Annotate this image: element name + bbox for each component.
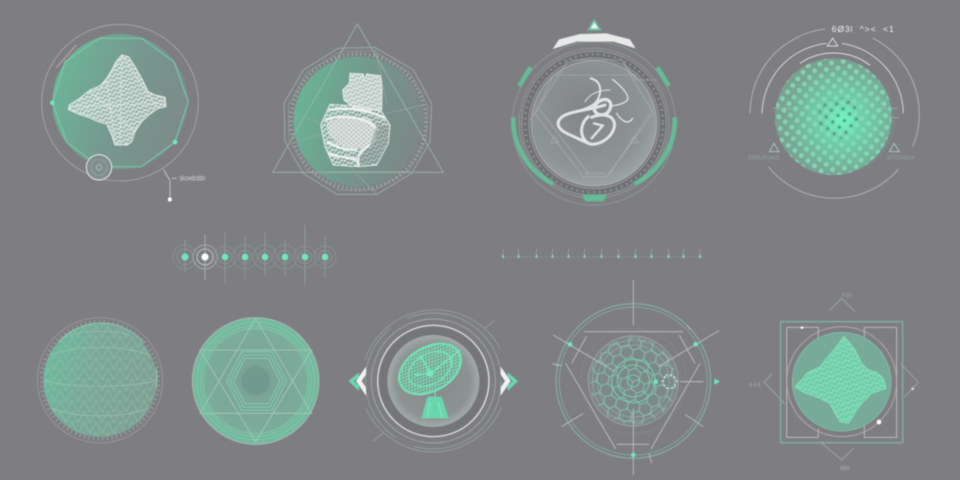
bottom label: 63%	[840, 466, 850, 472]
white ring	[378, 325, 489, 437]
concentric rings	[197, 322, 314, 440]
right triangle	[889, 143, 899, 152]
hexagram	[200, 318, 312, 442]
panel: framed terrain	[749, 293, 918, 472]
outer rings	[556, 304, 711, 458]
green tab upper left	[519, 67, 531, 86]
green disc	[52, 34, 188, 169]
strip: tick ruler	[502, 249, 702, 258]
white dots	[801, 326, 914, 424]
node 1	[173, 240, 197, 272]
outer arcs	[365, 310, 502, 452]
dodecagon outline	[284, 47, 432, 194]
right chevrons	[501, 367, 518, 396]
inner polygon outline	[288, 51, 428, 190]
triangle mesh	[44, 324, 156, 436]
node 3	[214, 232, 236, 284]
green arrowhead	[714, 379, 720, 385]
dashed hexagon	[662, 375, 677, 388]
latitude lines	[44, 331, 156, 416]
outer ring	[42, 24, 198, 181]
dish	[390, 333, 470, 418]
side brackets	[787, 327, 897, 437]
terrain mesh	[68, 55, 166, 145]
green terrain	[795, 337, 886, 423]
green bracket left	[513, 117, 553, 184]
node dot left	[50, 100, 55, 105]
mid rings	[365, 313, 501, 449]
panel: hexagram disc	[192, 318, 319, 444]
node 6	[273, 240, 297, 276]
radial lines	[293, 47, 423, 194]
left triangle	[769, 143, 779, 152]
white concentric rings	[581, 328, 686, 434]
top triangle	[827, 38, 838, 46]
inner hexagon frame	[530, 60, 657, 177]
inner green rings	[612, 359, 655, 403]
green node dots	[568, 342, 698, 457]
specimen curves	[558, 78, 633, 144]
node 4	[233, 236, 257, 280]
node 7	[294, 225, 316, 285]
connector with label	[163, 169, 205, 201]
node 2 white	[193, 234, 217, 280]
panel: halftone sphere with arcs	[748, 24, 919, 198]
white arc header	[553, 33, 636, 49]
hex sphere	[589, 337, 677, 425]
sphere fill	[43, 324, 157, 437]
green tab bottom	[582, 194, 607, 201]
green disc	[293, 57, 423, 187]
tick ring	[41, 322, 159, 439]
diagonal ticks	[373, 321, 494, 441]
tick marks	[773, 108, 899, 118]
inner white arc	[800, 53, 870, 65]
frame lines	[552, 280, 719, 475]
bright rim	[58, 323, 157, 388]
header code: 6Ø3l ^>< <1	[832, 24, 894, 34]
node 8	[314, 236, 336, 278]
top label: F10	[842, 293, 851, 299]
polygon outline	[52, 38, 188, 167]
top triangle marker	[587, 19, 602, 31]
accent arc	[57, 45, 77, 67]
left chevrons	[349, 367, 366, 396]
panel: geodesic target	[552, 280, 720, 475]
toothed ring	[291, 54, 426, 189]
strip: node dots	[173, 225, 336, 285]
right caption: ATTENBOX	[887, 156, 915, 162]
outer ring	[787, 327, 897, 437]
outer arcs	[750, 29, 919, 198]
outer rings	[512, 42, 676, 205]
panel: organic specimen in technical dial	[512, 19, 676, 205]
disc	[192, 318, 319, 444]
inner lens	[531, 61, 657, 186]
panel: triangulated sphere	[37, 318, 163, 443]
connector with label: skcwdrddn	[179, 174, 205, 183]
node 5	[253, 232, 277, 276]
green tab upper right	[657, 67, 669, 86]
middle arcs	[762, 43, 903, 113]
scope circle	[86, 155, 112, 180]
green bracket right	[635, 117, 675, 184]
left label: 646	[749, 383, 761, 389]
outer pink ring	[37, 318, 163, 443]
triangle frame	[273, 24, 443, 172]
panel: wireframe terrain in polygon ring	[42, 24, 205, 201]
square frame	[781, 322, 903, 443]
halftone sphere	[775, 58, 895, 175]
disc	[792, 332, 891, 431]
panel: radar dish	[349, 310, 518, 452]
panel: wireframe joint in triangle and dodecagon	[273, 24, 443, 194]
dark core	[242, 367, 270, 395]
node dot right	[173, 140, 177, 144]
nested hexagons	[227, 352, 287, 410]
lens	[387, 335, 479, 427]
joint mesh	[321, 73, 390, 167]
dark lens band	[383, 331, 483, 431]
corner diamonds	[764, 298, 918, 460]
left caption: ERRUPDATE	[748, 156, 780, 162]
